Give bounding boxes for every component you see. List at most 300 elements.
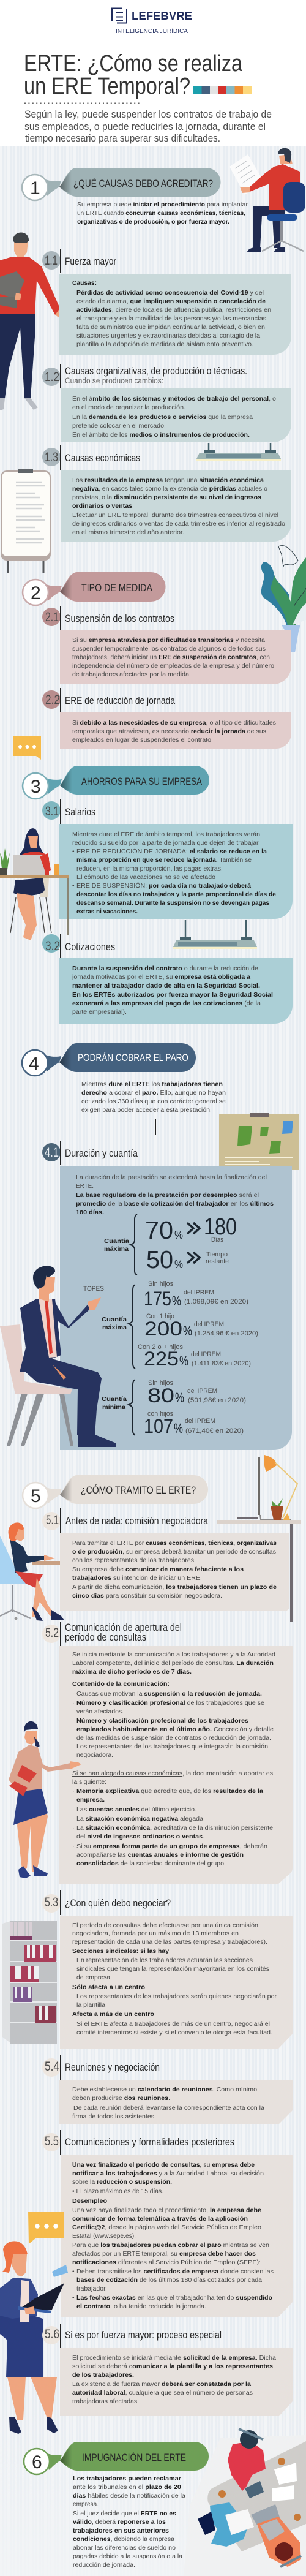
panel: reuniones xyxy=(59,2080,293,2124)
chart: topes cuantía máxima xyxy=(83,1280,258,1370)
icon: speech bubble xyxy=(13,736,41,760)
subsection 1.2: Cuando se producen cambios: xyxy=(65,376,163,385)
panel: fuerza mayor proceso especial: solicitud se deberá c omunicar a la plantilla y a los representantes xyxy=(72,2363,273,2370)
panel: salarios: • xyxy=(72,883,75,890)
panel: duración y cuantía xyxy=(60,1166,292,1450)
text: intro section 1 xyxy=(77,202,248,225)
panel: período de consultas: del nivel de ingresos ordinarios o ventas . xyxy=(76,1834,204,1840)
panel: suspensión de contratos: independencia del número de empleados de la empresa y del número xyxy=(72,663,274,670)
panel: fuerza mayor xyxy=(59,274,291,355)
panel: salarios: ERE DE REDUCCIÓN DE JORNADA: el salario se reduce en la xyxy=(76,847,267,855)
subsection 3.2 xyxy=(42,934,115,959)
text: impugnación: ante los tribunales en el plazo de 20 xyxy=(73,2484,181,2491)
panel: período de consultas: La situación económica , acreditativa de la disminución persistente xyxy=(76,1825,273,1832)
panel: salarios: extras ni vacaciones. xyxy=(76,908,138,915)
panel: causas organizativas: pretende colocar en el mercado. xyxy=(72,423,166,429)
subsection 3.2: Cotizaciones xyxy=(65,941,115,953)
panel: causas económicas: en el mismo trimestre del año anterior. xyxy=(72,529,184,536)
section 5 header xyxy=(23,1475,208,1508)
chart: topes cuantía máxima: (1.254,96 € en 2020) xyxy=(195,1330,258,1337)
illustration: desk lamp and plant on shelf xyxy=(217,1455,301,1622)
subsection 4.1: 4.1 xyxy=(45,1146,59,1160)
chart: cuantía máxima 70/50: máxima xyxy=(104,1246,129,1253)
illustration: corkboard xyxy=(219,1113,299,1170)
subsection 5.3 xyxy=(42,1890,171,1915)
text: impugnación: días hábiles desde la notificación de la xyxy=(73,2493,185,2499)
panel: cotizaciones xyxy=(59,958,293,1024)
panel: período de consultas: máxima de dicho período es de 7 días. xyxy=(72,1669,192,1675)
subsection 2.1 xyxy=(42,606,174,630)
chart: topes cuantía máxima: del IPREM xyxy=(191,1351,221,1358)
panel: cotizaciones: En los ERTEs autorizados por fuerza mayor la Seguridad Social xyxy=(72,992,273,999)
panel: salarios: descanso semanal. Durante la suspensión no se devengan pagas xyxy=(76,900,269,907)
panel: salarios: Mientras dure el ERE de ámbito temporal, los trabajadores verán xyxy=(72,831,260,838)
chart: cuantía mínima: del IPREM xyxy=(187,1388,217,1395)
panel: fuerza mayor proceso especial: autoridad laboral , cualquiera que sea el número de personas xyxy=(72,2390,253,2397)
panel: reuniones: firma de todos los asistentes. xyxy=(72,2113,156,2120)
panel: comunicaciones: afectados por un ERTE temporal, su empresa debe hacer dos xyxy=(72,2251,256,2257)
panel: causas económicas: Efectuar un ERE temporal, durante dos trimestres consecutivos el nivel xyxy=(72,512,278,519)
panel: período de consultas: de las medidas de suspensión de contratos o reducción de jornada. xyxy=(76,1735,271,1742)
panel: con quién debo negociar: de empresa xyxy=(76,1974,110,1981)
illustration: seated man in suit xyxy=(0,1266,116,1447)
panel: causas económicas: de ingresos ordinarios o ventas de cada trimestre es inferior al registrado xyxy=(72,521,285,527)
panel: con quién debo negociar: la plantilla. xyxy=(76,2002,107,2009)
panel: causas organizativas: En la demanda de los productos o servicios que la empresa xyxy=(72,414,253,421)
panel: período de consultas: · xyxy=(72,1843,74,1850)
illustration: woman at desk xyxy=(0,828,69,940)
panel: período de consultas: empleados habitualmente en el último año. Concreción y detalle xyxy=(76,1726,274,1733)
text: duración: promedio de la base de cotización del trabajador en los últimos xyxy=(76,1201,274,1207)
panel: comisión negociadora xyxy=(60,1533,289,1611)
intro text: tiempo necesario para superar sus dificultades. xyxy=(25,132,220,144)
text: duración: ERTE. xyxy=(76,1183,94,1190)
panel: comisión negociadora: cinco días para constituir su comisión negociadora. xyxy=(72,1593,222,1600)
chart: topes cuantía máxima: máxima xyxy=(102,1324,127,1331)
panel: con quién debo negociar: negociadora, formada por un máximo de 13 miembros en xyxy=(72,1930,239,1937)
panel: fuerza mayor: situaciones urgentes y extraordinarias debidas al contagio de la xyxy=(76,333,260,339)
panel: cotizaciones: jornada motivadas por el ERTE, su empresa está obligada a xyxy=(72,974,250,981)
panel: reducción de jornada xyxy=(60,712,291,749)
subsection 1.1: Fuerza mayor xyxy=(65,255,116,267)
panel: comunicaciones: • El plazo máximo es de 15 días. xyxy=(72,2188,163,2195)
panel: suspensión de contratos xyxy=(60,630,291,684)
chart: cuantía mínima: mínima xyxy=(102,1404,125,1411)
text: paro: exigen para poder acceder a esta prestación. xyxy=(81,1107,212,1114)
illustration: bookshelf with folders xyxy=(2,1921,57,2044)
panel: salarios: reducen, en la misma proporción, las pagas extras. xyxy=(76,866,223,872)
subsection 5.4: Reuniones y negociación xyxy=(65,2061,160,2073)
subsection 5.6: Si es por fuerza mayor: proceso especial xyxy=(65,2329,222,2341)
panel: cotizaciones: mantener al trabajador dado de alta en la Seguridad Social. xyxy=(72,983,260,989)
panel: reuniones: deben producirse dos reuniones . xyxy=(72,2095,170,2102)
section 4 header: PODRÁN COBRAR EL PARO xyxy=(78,1052,188,1063)
panel: causas económicas xyxy=(61,470,291,542)
panel: período de consultas: Laboral competente, del inicio del período de consultas. La duración xyxy=(72,1660,274,1667)
panel: fuerza mayor: Pérdidas de actividad como consecuencia del Covid-19 y del xyxy=(76,290,264,297)
text: paro xyxy=(81,1081,226,1114)
subsection 1.3 xyxy=(42,445,140,470)
subsection 5.2: Comunicación de apertura del xyxy=(65,1622,182,1633)
panel: comunicaciones: Deben transmitirse los certificados de empresa donde consten las xyxy=(76,2268,274,2275)
subsection 3.1: Salarios xyxy=(65,806,95,818)
text: impugnación: válido, deberá reponerse a los xyxy=(73,2519,166,2526)
panel: fuerza mayor: estado de alarma, que impliquen suspensión o cancelación de xyxy=(76,298,266,305)
panel: comunicaciones: Para que los trabajadores puedan cobrar el paro mientras se ven xyxy=(72,2242,269,2249)
dashed connector xyxy=(60,1119,155,1136)
intro text: Según la ley, puede suspender los contratos de trabajo de xyxy=(24,108,272,120)
subsection 5.1 xyxy=(42,1508,208,1533)
panel: suspensión de contratos: Si su empresa atraviesa por dificultades transitorias y necesita xyxy=(72,637,265,644)
logo: Lefebvre: LEFEBVRE xyxy=(132,10,192,22)
panel: comunicaciones: sobre la reducción o suspensión. xyxy=(72,2179,172,2186)
panel: fuerza mayor proceso especial: de los trabajadores. xyxy=(72,2372,134,2379)
panel: período de consultas: acompañarse las cuentas anuales e informe de gestión xyxy=(76,1852,244,1859)
panel: período de consultas: Contenido de la comunicación: xyxy=(72,1681,170,1688)
panel: fuerza mayor proceso especial xyxy=(60,2348,293,2416)
icon: speech bubble xyxy=(28,2212,64,2244)
illustration: meeting seen from above xyxy=(184,2429,306,2576)
chart: topes cuantía máxima: Con 2 o + hijos xyxy=(138,1343,184,1351)
text: impugnación: pagadas debido a la suspensión o a la xyxy=(73,2553,182,2560)
subsection 5.5: 5.5 xyxy=(45,2134,59,2148)
text: paro: derecho a cobrar el paro. Ello, aunque no hayan xyxy=(81,1090,226,1097)
panel: período de consultas: Memoria explicativa que acredite que, de los resultados de la xyxy=(76,1788,263,1795)
section 1 header: ¿QUÉ CAUSAS DEBO ACREDITAR? xyxy=(73,178,213,189)
panel: período de consultas: · xyxy=(72,1700,74,1707)
subsection 1.1: 1.1 xyxy=(45,254,58,268)
text: impugnación: trabajadores en sus anteriores xyxy=(73,2528,169,2534)
chart: cuantía máxima 70/50: 50 xyxy=(146,1245,173,1274)
panel: cotizaciones: Durante la suspensión del contrato o durante la reducción de xyxy=(72,965,258,972)
text: paro: Mientras dure el ERTE los trabajadores tienen xyxy=(81,1081,223,1088)
chart: topes cuantía máxima: (1.098,09€ en 2020) xyxy=(184,1298,248,1305)
panel: con quién debo negociar xyxy=(60,1916,293,2049)
illustration: plant xyxy=(261,546,306,652)
panel: comunicaciones: Una vez finalizado el período de consultas, su empresa debe xyxy=(72,2162,255,2169)
text: paro: cotizado los 360 días que con carácter general se xyxy=(81,1098,226,1105)
chart: topes cuantía máxima: del IPREM xyxy=(184,1289,214,1296)
intro text xyxy=(24,108,272,144)
logo: Lefebvre xyxy=(112,9,192,35)
panel: reducción de jornada: empleados en lugar de suspenderles el contrato xyxy=(72,737,211,744)
subsection 5.3: 5.3 xyxy=(45,1895,58,1909)
text: impugnación: reducción de jornada. xyxy=(73,2562,135,2569)
chart: topes cuantía máxima: % xyxy=(172,1293,181,1309)
panel: suspensión de contratos: de trabajadores afectados por la medida. xyxy=(72,671,191,678)
subsection 1.2: Causas organizativas, de producción o técnicas. xyxy=(65,365,247,377)
subsection 2.1: Suspensión de los contratos xyxy=(65,613,174,624)
panel: fuerza mayor: · xyxy=(72,290,74,297)
panel: fuerza mayor: plantilla o la adopción de medidas de aislamiento preventivo. xyxy=(76,341,253,348)
panel: período de consultas: · xyxy=(72,1807,74,1813)
text: duración: La base reguladora de la prestación por desempleo será el xyxy=(76,1192,259,1199)
panel: cotizaciones: exonerará a las empresas del pago de las cotizaciones (de la xyxy=(72,1000,261,1007)
panel: fuerza mayor proceso especial: trabajadoras afectadas. xyxy=(72,2398,139,2405)
panel: suspensión de contratos: trabajadores, deberá iniciar un ERE de suspensión de contratos , con xyxy=(72,654,270,661)
panel: salarios: misma proporción en que se reduce la jornada. También se xyxy=(76,857,252,864)
panel: con quién debo negociar: En representación de los trabajadores actuarán las secciones xyxy=(76,1957,253,1964)
chart: cuantía mínima: % xyxy=(174,1421,183,1436)
panel: causas organizativas: En el ámbito de los medios o instrumentos de producción. xyxy=(72,432,250,439)
panel: fuerza mayor proceso especial: La existencia de fuerza mayor deberá ser constatada por la xyxy=(72,2381,251,2388)
panel: comunicaciones: trabajador. xyxy=(76,2286,107,2292)
panel: período de consultas: · xyxy=(72,1718,74,1724)
title xyxy=(24,51,243,99)
subsection 2.2: ERE de reducción de jornada xyxy=(65,695,175,706)
chart: topes cuantía máxima: TOPES xyxy=(83,1285,104,1293)
panel: causas económicas: previstas, o la disminución persistente de su nivel de ingresos xyxy=(72,494,261,501)
panel: comisión negociadora: con los representantes de los trabajadores. xyxy=(72,1557,196,1564)
panel: período de consultas: Si se han alegado causas económicas , la documentación a aportar es xyxy=(72,1770,273,1777)
subsection 5.1: Antes de nada: comisión negociadora xyxy=(65,1515,208,1527)
section 2 header: TIPO DE MEDIDA xyxy=(81,582,153,594)
panel: fuerza mayor proceso especial: El procedimiento se iniciará mediante solicitud de la empresa. Dicha xyxy=(72,2355,276,2362)
panel: causas económicas: ordinarios o ventas . xyxy=(72,503,134,510)
panel: causas económicas: negativa, en casos tales como la existencia de pérdidas actuales o xyxy=(72,486,267,493)
section 1 header: 1 xyxy=(30,178,40,198)
panel: período de consultas: Número y clasificación profesional de los trabajadores xyxy=(76,1718,248,1724)
subsection 2.2: 2.2 xyxy=(45,693,60,707)
chart: topes cuantía máxima: % xyxy=(183,1323,192,1339)
panel: comunicaciones: Certific@2 , desde la página web del Servicio Público de Empleo xyxy=(72,2224,261,2231)
section 5 header: 5 xyxy=(31,1486,41,1506)
section 3 header xyxy=(23,766,209,799)
panel: período de consultas: negociadora. xyxy=(76,1752,113,1759)
chart: topes cuantía máxima: Sin hijos xyxy=(148,1280,173,1288)
panel: comunicaciones: Desempleo xyxy=(72,2198,107,2205)
illustration: man reading on chair xyxy=(230,148,305,252)
panel: causas económicas: Los resultados de la empresa tengan una situación económica xyxy=(72,477,264,484)
chart: cuantía máxima 70/50: % xyxy=(174,1229,183,1241)
text: duración xyxy=(76,1174,274,1216)
title: un ERE Temporal? xyxy=(24,74,190,99)
section 3 header: 3 xyxy=(31,777,41,797)
panel: reuniones: De cada reunión deberá levantarse la correspondiente acta con la xyxy=(73,2105,264,2112)
subsection 5.6: 5.6 xyxy=(45,2327,59,2341)
panel: comunicaciones: • xyxy=(72,2268,75,2275)
chart: topes cuantía máxima: Con 1 hijo xyxy=(146,1313,174,1320)
panel: con quién debo negociar: comité intercentros si existe y si el convenio le otorga esta facultad. xyxy=(76,2030,272,2036)
panel: período de consultas: Número y clasificación profesional de los trabajadores que se xyxy=(76,1700,264,1707)
panel: causas organizativas: En el ámbito de los sistemas y métodos de trabajo del personal , o xyxy=(72,396,276,402)
illustration: standing woman xyxy=(9,1721,81,1878)
section 6 header: 6 xyxy=(32,2452,42,2472)
panel: fuerza mayor: Causas: xyxy=(72,280,97,287)
chart: topes cuantía máxima: 200 xyxy=(144,1318,182,1340)
panel: salarios: descontar los días no trabajados y la parte proporcional de días de xyxy=(76,891,276,898)
chart: topes cuantía máxima: Cuantía xyxy=(102,1316,127,1323)
panel: fuerza mayor: el transporte y en la movilidad de las personas y/o las mercancías, xyxy=(76,315,268,322)
section 5 header: ¿CÓMO TRAMITO EL ERTE? xyxy=(81,1484,196,1496)
panel: salarios xyxy=(59,824,293,919)
chart: topes cuantía máxima: % xyxy=(179,1353,188,1369)
subsection 4.1: Duración y cuantía xyxy=(65,1147,138,1159)
chart: cuantía máxima 70/50: 180 xyxy=(204,1214,237,1240)
panel: comunicaciones xyxy=(61,2155,293,2317)
panel: período de consultas: Se inicia mediante la comunicación a los trabajadores y a la Autoridad xyxy=(72,1652,275,1658)
panel: con quién debo negociar: El período de consultas debe efectuarse por una única comisión xyxy=(72,1922,258,1929)
text: impugnación: Los trabajadores pueden reclamar xyxy=(73,2476,181,2482)
text: impugnación xyxy=(73,2476,185,2569)
chart: cuantía máxima 70/50: Días xyxy=(211,1236,223,1244)
illustration: standing man xyxy=(0,233,68,410)
subsection 1.2 xyxy=(42,364,247,388)
text: impugnación: empresa. xyxy=(73,2501,99,2508)
chart: cuantía mínima: 107 xyxy=(144,1415,173,1437)
subsection 5.5 xyxy=(42,2130,234,2155)
panel: comunicaciones: Estatal (www.sepe.es). xyxy=(72,2233,136,2240)
panel: período de consultas: · xyxy=(72,1825,74,1832)
panel: comisión negociadora: o de producción , su empresa deberá tramitar un período de consultas xyxy=(72,1549,276,1555)
chart: topes cuantía máxima: 225 xyxy=(144,1348,179,1370)
subsection 4.1 xyxy=(42,1141,138,1165)
panel: causas organizativas: en el modo de organizar la producción. xyxy=(72,404,185,411)
text: duración: 180 días. xyxy=(76,1209,104,1216)
panel: salarios: El cómputo de las vacaciones no se ve afectado xyxy=(76,874,215,881)
panel: comunicaciones: notificaciones diferentes al Servicio Público de Empleo (SEPE): xyxy=(72,2259,261,2266)
text: impugnación: Si el juez decide que el ERTE no es xyxy=(73,2510,176,2517)
panel: fuerza mayor: falta de suministros que impidan continuar la actividad, o bien en xyxy=(76,324,265,331)
panel: con quién debo negociar: sindicales que tengan la representación mayoritaria en los comités xyxy=(76,1966,269,1973)
illustration: woman with laptop xyxy=(0,2241,68,2434)
illustration: ceiling lamp xyxy=(173,920,257,949)
chart: cuantía mínima: con hijos xyxy=(147,1410,173,1418)
illustration: ceiling lamp xyxy=(196,443,281,461)
panel: período de consultas: La situación económica negativa alegada xyxy=(76,1816,203,1822)
subsection 1.1 xyxy=(42,249,116,273)
subsection 1.3: Causas económicas xyxy=(65,452,140,464)
logo: Lefebvre: INTELIGENCIA JURÍDICA xyxy=(116,27,188,35)
section 4 header: 4 xyxy=(29,1054,39,1074)
text: duración: La duración de la prestación se extenderá hasta la finalización del xyxy=(76,1174,267,1181)
section 4 header xyxy=(22,1043,196,1076)
subsection 5.2: 5.2 xyxy=(45,1626,59,1640)
subsection 1.2: 1.2 xyxy=(45,370,59,384)
section 3 header: AHORROS PARA SU EMPRESA xyxy=(81,776,203,787)
panel: período de consultas: Causas que motivan la suspensión o la reducción de jornada. xyxy=(76,1691,262,1698)
panel: reducción de jornada: Si debido a las necesidades de su empresa , o al tipo de dificultades xyxy=(72,720,276,727)
subsection 5.2 xyxy=(42,1622,182,1646)
illustration: woman typing xyxy=(0,1522,64,1621)
colour swatches xyxy=(193,86,252,94)
panel: comunicaciones: bases de cotización de los últimos 180 días cotizados por cada xyxy=(76,2277,262,2284)
section 2 header: 2 xyxy=(31,583,41,603)
panel: fuerza mayor: actividades , cierre de locales de afluencia pública, restricciones en xyxy=(76,307,271,314)
chart: cuantía mínima: Sin hijos xyxy=(148,1380,173,1387)
panel: salarios: ERE DE SUSPENSIÓN: por cada día no trabajado deberá xyxy=(76,882,251,890)
panel: reuniones: Debe establecerse un calendario de reuniones . Como mínimo, xyxy=(72,2087,259,2093)
chart: cuantía máxima 70/50 xyxy=(104,1214,237,1275)
subsection 3.2: 3.2 xyxy=(45,939,60,953)
subsection 5.1: 5.1 xyxy=(46,1513,59,1527)
panel: con quién debo negociar: Secciones sindicales: si las hay xyxy=(72,1948,169,1955)
panel: comunicaciones: el contrato , o ha tenido reducida la jornada. xyxy=(76,2303,206,2310)
panel: período de consultas: verán afectados. xyxy=(76,1709,124,1715)
subsection 5.4: 5.4 xyxy=(45,2060,59,2074)
title: ERTE: ¿Cómo se realiza xyxy=(24,51,243,77)
panel: comisión negociadora: trabajadores su intención de iniciar un ERE. xyxy=(72,1575,202,1582)
panel: comunicaciones: Una vez haya finalizado todo el procedimiento, la empresa debe xyxy=(72,2207,261,2214)
subsection 5.4 xyxy=(42,2055,160,2080)
intro text: sus empleados, o puede reducirles la jornada, durante el xyxy=(24,121,266,132)
chart: topes cuantía máxima: (1.411,83€ en 2020) xyxy=(192,1360,251,1367)
subsection 2.1: 2.1 xyxy=(45,610,59,624)
subsection 5.6 xyxy=(42,2324,222,2348)
chart: topes cuantía máxima: 175 xyxy=(144,1288,171,1310)
panel: causas organizativas xyxy=(61,388,291,442)
section 1 header xyxy=(22,168,220,200)
chart: cuantía máxima 70/50: 70 xyxy=(145,1216,173,1244)
panel: período de consultas xyxy=(59,1646,293,1884)
subsection 5.3: ¿Con quién debo negociar? xyxy=(65,1897,171,1909)
chart: topes cuantía máxima: del IPREM xyxy=(194,1321,224,1328)
panel: con quién debo negociar: Los representantes de los trabajadores serán quienes negociarán por xyxy=(76,1993,277,2000)
panel: comisión negociadora: Su empresa debe comunicar de manera fehaciente a los xyxy=(72,1566,244,1573)
chart: cuantía mínima: Cuantía xyxy=(102,1396,127,1403)
text: impugnación: abonar las diferencias de sueldo no xyxy=(73,2545,176,2551)
chart: cuantía máxima 70/50: restante xyxy=(206,1258,229,1265)
subsection 5.5: Comunicaciones y formalidades posteriores xyxy=(65,2136,234,2148)
panel: suspensión de contratos: suspender temporalmente los contratos de algunos o de todos sus xyxy=(72,646,266,652)
panel: período de consultas: la siguiente: xyxy=(72,1779,106,1786)
text: intro section 1: Su empresa puede iniciar el procedimiento para implantar xyxy=(77,202,248,208)
panel: con quién debo negociar: Afecta a más de un centro xyxy=(72,2011,154,2018)
subsection 1.3: 1.3 xyxy=(45,450,58,464)
panel: comunicaciones: notificar a los trabajadores y a la Autoridad Laboral su decisión xyxy=(72,2170,264,2177)
panel: período de consultas: Las cuentas anuales del último ejercicio. xyxy=(76,1807,196,1813)
subsection 2.2 xyxy=(42,688,175,712)
panel: comunicaciones: comunicar de forma telemática a través de la aplicación xyxy=(72,2216,248,2223)
panel: período de consultas: Los representantes de los trabajadores que integrarán la comisión xyxy=(76,1743,268,1750)
panel: con quién debo negociar: Si el ERTE afecta a trabajadores de más de un centro, negociará el xyxy=(76,2021,270,2028)
panel: con quién debo negociar: representación de cada una de las partes (empresa y trabajadores). xyxy=(72,1939,267,1946)
dashed connector xyxy=(61,227,157,244)
text: impugnación: condiciones , debiendo la empresa xyxy=(73,2536,174,2543)
text: intro section 1: organizativas o de producción, o por fuerza mayor. xyxy=(77,219,230,225)
panel: comunicaciones: Las fechas exactas en las que el trabajador ha tenido suspendido xyxy=(76,2295,272,2302)
chart: cuantía mínima: del IPREM xyxy=(185,1418,215,1425)
subsection 3.1: 3.1 xyxy=(45,804,59,818)
panel: comisión negociadora: A partir de dicha comunicación, los trabajadores tienen un plazo de xyxy=(72,1584,277,1591)
chart: cuantía mínima xyxy=(102,1380,246,1437)
section 6 header: IMPUGNACIÓN DEL ERTE xyxy=(82,2452,186,2463)
panel: comunicaciones: • xyxy=(72,2295,75,2302)
illustration: whiteboard xyxy=(1,469,51,573)
subsection 3.1 xyxy=(42,799,95,824)
chart: cuantía mínima: % xyxy=(175,1390,184,1405)
chart: cuantía máxima 70/50: Cuantía xyxy=(104,1238,129,1245)
panel: período de consultas: · xyxy=(72,1691,74,1698)
panel: período de consultas: · xyxy=(72,1816,74,1822)
panel: cotizaciones: parte empresarial). xyxy=(72,1009,127,1016)
panel: salarios: • xyxy=(72,848,75,855)
chart: cuantía máxima 70/50: % xyxy=(174,1258,183,1271)
panel: comisión negociadora: Para tramitar el ERTE por causas económicas, técnicas, organizativas xyxy=(72,1540,277,1547)
panel: reducción de jornada: temporales que atraviesen, es necesario reducir la jornada de sus xyxy=(72,728,266,735)
subsection 5.2: período de consultas xyxy=(65,1631,146,1643)
section 6 header xyxy=(24,2442,209,2474)
chart: cuantía mínima: (501,98€ en 2020) xyxy=(188,1397,246,1404)
text: intro section 1: un ERTE cuando concurran causas económicas, técnicas, xyxy=(77,210,245,217)
panel: período de consultas: Si su empresa forma parte de un grupo de empresas , deberán xyxy=(76,1843,267,1850)
panel: período de consultas: empresa. xyxy=(76,1797,105,1804)
panel: salarios: reducido su sueldo por la parte de jornada que dejen de trabajar. xyxy=(72,840,260,847)
chart: cuantía mínima: (671,40€ en 2020) xyxy=(185,1427,244,1435)
chart: cuantía máxima 70/50: Tiempo xyxy=(206,1251,228,1258)
panel: período de consultas: consolidados de la sociedad dominante del grupo. xyxy=(76,1860,226,1867)
section 2 header xyxy=(23,572,165,605)
